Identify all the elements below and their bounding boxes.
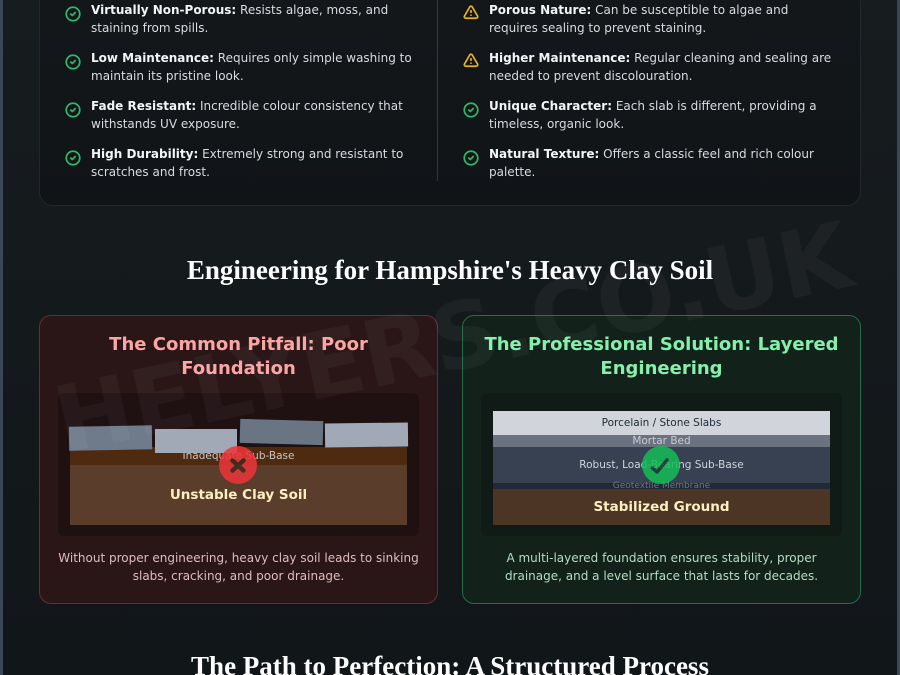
text: Higher Maintenance: Higher Maintenance: Regular cleaning and sealing are needed to prevent discolouration. [489, 51, 831, 83]
icon: check Low Maintenance [65, 54, 81, 70]
slab 4 [325, 422, 408, 448]
slab 1 [69, 425, 152, 451]
panel: professional solution [462, 315, 861, 604]
layer: sub-base: Robust, Load-Bearing Sub-Base [579, 459, 744, 471]
text: Porous Nature: Porous Nature: Can be susceptible to algae and requires sealing to prevent staining. [489, 3, 788, 35]
icon: check Natural Texture [463, 150, 479, 166]
panel: material comparison card [39, 0, 861, 206]
layer: stabilized ground: Stabilized Ground [593, 499, 730, 515]
text: pitfall description: Without proper engineering, heavy clay soil leads to sinking slabs, cracking, and poor drainage. [58, 551, 419, 583]
layer: inadequate sub-base: Inadequate Sub-Base [183, 450, 294, 462]
layer: mortar bed: Mortar Bed [632, 435, 691, 447]
diagram: poor foundation [58, 393, 419, 536]
divider line [437, 0, 438, 181]
layer: slabs [493, 411, 830, 435]
text: Fade Resistant: Fade Resistant: Incredible colour consistency that withstands UV exposure. [91, 99, 403, 131]
heading: solution: The Professional Solution: Layered Engineering [484, 334, 839, 379]
layer: unstable clay soil: Unstable Clay Soil [170, 487, 307, 503]
diagram: layered foundation [481, 393, 842, 536]
layer: geotextile membrane: Geotextile Membrane [613, 481, 710, 491]
text: Unique Character: Unique Character: Each slab is different, providing a timeless, organic look. [489, 99, 817, 131]
panel: common pitfall [39, 315, 438, 604]
layer: inadequate sub-base [70, 447, 407, 465]
icon: check Virtually Non-Porous [65, 6, 81, 22]
text: Natural Texture: Natural Texture: Offers a classic feel and rich colour palette. [489, 147, 814, 179]
layer: slabs: Porcelain / Stone Slabs [602, 417, 721, 429]
layer: unstable clay soil [70, 465, 407, 525]
layer: stabilized ground [493, 489, 830, 525]
icon: check Unique Character [463, 102, 479, 118]
layer: mortar bed [493, 435, 830, 447]
text: solution description: A multi-layered foundation ensures stability, proper drainage, and a level surface that lasts for decades. [505, 551, 818, 583]
text: High Durability: High Durability: Extremely strong and resistant to scratches and frost. [91, 147, 403, 179]
text: Virtually Non-Porous: Virtually Non-Porous: Resists algae, moss, and staining from spills. [91, 3, 388, 35]
icon: tick badge [642, 446, 680, 484]
text: Low Maintenance: Low Maintenance: Requires only simple washing to maintain its pristine look. [91, 51, 412, 83]
heading: pitfall: The Common Pitfall: Poor Foundation [109, 334, 368, 379]
icon: check Fade Resistant [65, 102, 81, 118]
icon: warning Higher Maintenance [463, 53, 479, 68]
slab 2 [155, 429, 237, 453]
slab 3 [240, 419, 323, 445]
icon: warning Porous Nature [463, 5, 479, 20]
layer: sub-base [493, 447, 830, 483]
icon: cross badge [219, 446, 257, 484]
heading: clay soil section: Engineering for Hampshire's Heavy Clay Soil [187, 255, 713, 285]
layer: geotextile membrane [493, 483, 830, 489]
icon: check High Durability [65, 150, 81, 166]
watermark: HELYERS.CO.UK [45, 202, 860, 475]
